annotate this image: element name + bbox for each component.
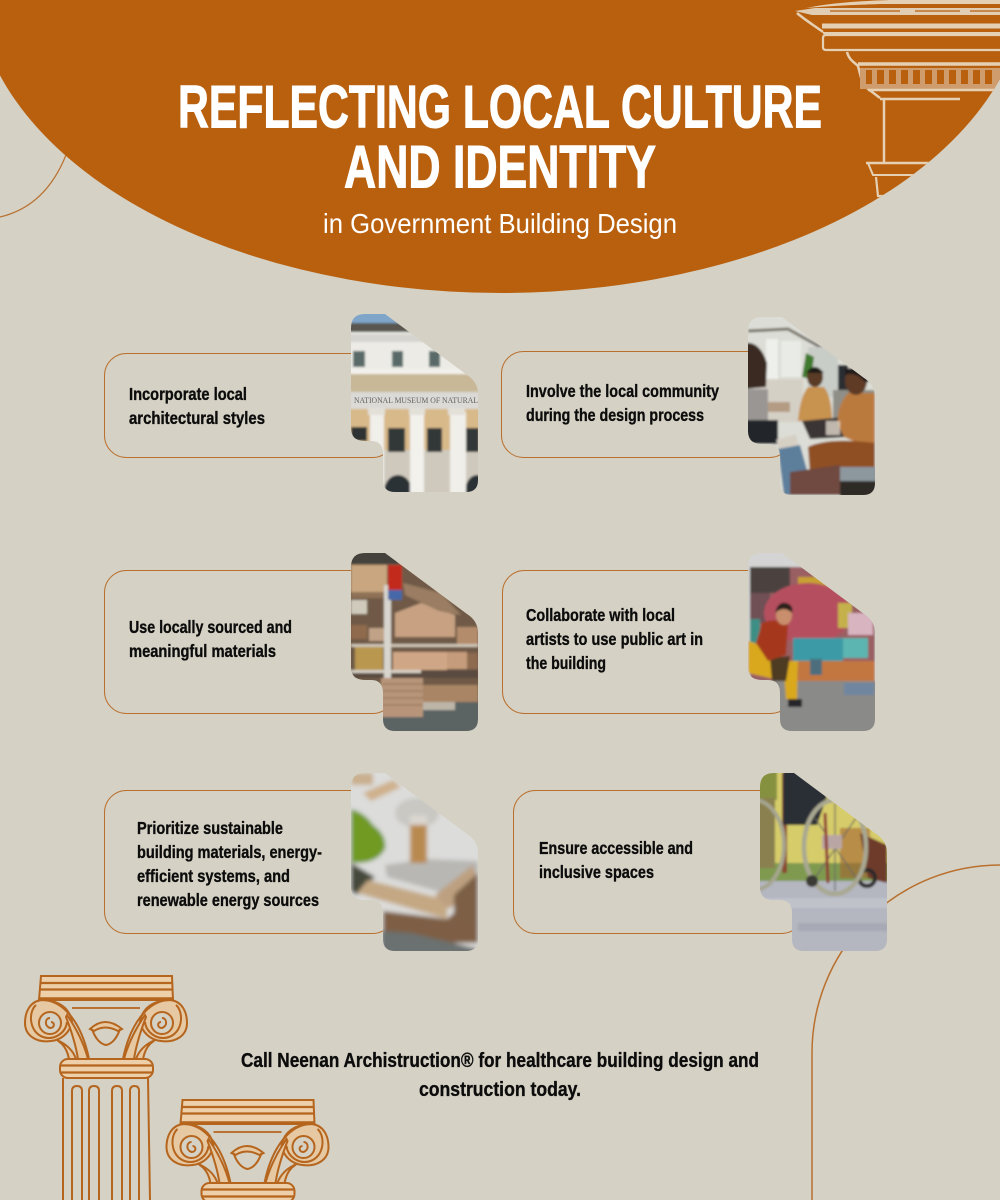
card text: the building (526, 653, 606, 673)
card text: artists to use public art in (526, 629, 703, 649)
card text: efficient systems, and (137, 866, 290, 886)
sign text: NATIONAL MUSEUM OF NATURAL (354, 395, 478, 405)
panel: sustainable materials (104, 770, 481, 955)
card outline (104, 790, 394, 934)
panel: collaborate with artists (502, 550, 878, 735)
card text: Ensure accessible and (539, 838, 693, 858)
card text: meaningful materials (129, 641, 276, 661)
call to action: construction today. (419, 1079, 581, 1101)
photo: museum building (351, 314, 478, 492)
icon: ionic column, large (25, 976, 187, 1200)
card outline (502, 570, 792, 714)
panel: incorporate local styles (104, 314, 478, 492)
card outline (104, 354, 394, 458)
icon: cornice column capital (795, 0, 1000, 196)
card text: Prioritize sustainable (137, 818, 283, 838)
card outline (514, 790, 804, 934)
panel: locally sourced materials (104, 550, 481, 735)
photo: wheelchair (760, 773, 887, 951)
card text: building materials, energy- (137, 842, 322, 862)
photo: wooden blocks on plans (348, 770, 481, 955)
card text: Collaborate with local (526, 605, 675, 625)
title (178, 74, 822, 200)
subtitle: in Government Building Design (323, 208, 677, 239)
icon: ionic column, small (166, 1100, 328, 1200)
decorative arc: right (812, 865, 1000, 1200)
call to action: Call Neenan Archistruction® for healthcare building design and (241, 1050, 759, 1072)
card text: inclusive spaces (539, 862, 654, 882)
card text: Incorporate local (129, 384, 247, 404)
card text: Use locally sourced and (129, 617, 292, 637)
photo: lumber warehouse (348, 550, 481, 735)
photo: community meeting (745, 314, 878, 499)
decorative arc: left (0, 155, 66, 217)
card text: during the design process (526, 405, 704, 425)
card text: Involve the local community (526, 381, 719, 401)
card outline (104, 570, 394, 714)
card text: architectural styles (129, 408, 265, 428)
panel: involve community (502, 314, 878, 499)
header shape (0, 0, 1000, 293)
photo: artist and mural (745, 550, 878, 735)
call to action (241, 1050, 759, 1101)
title: AND IDENTITY (344, 134, 656, 200)
card text: renewable energy sources (137, 890, 319, 910)
panel: accessible spaces (514, 770, 890, 955)
card outline (502, 352, 792, 458)
